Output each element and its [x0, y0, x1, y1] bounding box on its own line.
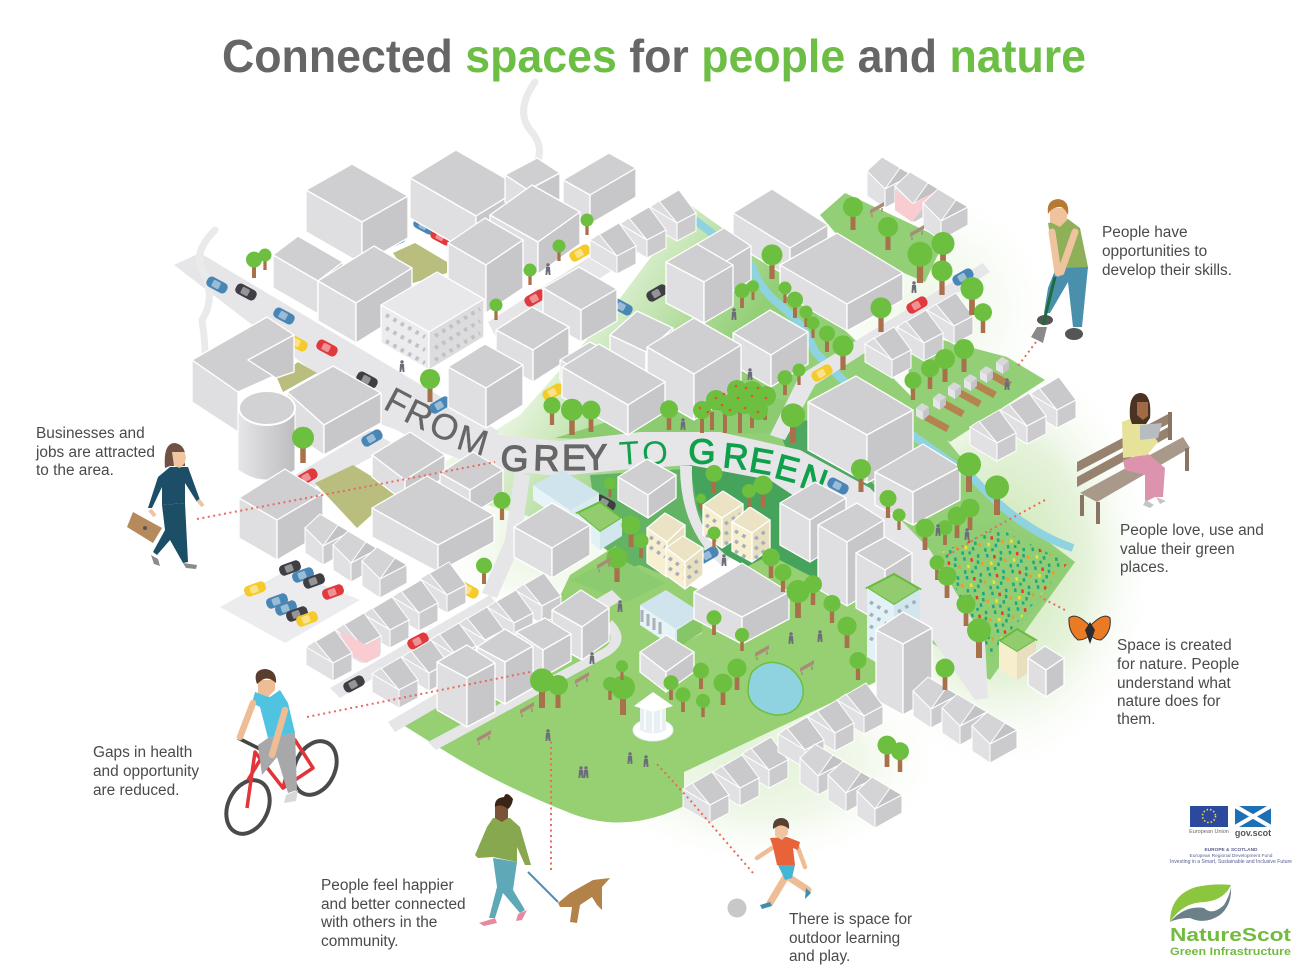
logo: gov.scot saltire	[1235, 806, 1271, 838]
small people in the park and streets	[400, 263, 1010, 778]
person: cyclist on red bicycle	[218, 669, 345, 841]
houses: south-west terrace rows	[306, 562, 561, 708]
funding text: Investing in a Smart, Sustainable and Inclusive Future	[1170, 859, 1292, 865]
buildings: south row	[437, 590, 609, 727]
buildings: east large blocks	[808, 157, 1076, 525]
logo: EU flag	[1189, 806, 1229, 835]
banner text: from grey to green	[378, 379, 832, 502]
soft green glow background	[430, 180, 1160, 870]
funding text: European Regional Development Fund	[1190, 853, 1273, 859]
pond	[748, 662, 803, 715]
label: community: with others in the	[320, 914, 437, 931]
person: reading on a bench	[1077, 393, 1190, 524]
label: community: community.	[321, 933, 399, 950]
parked car over lot	[456, 580, 480, 600]
person: business woman with briefcase	[127, 443, 203, 569]
logo: EU flag: European Union	[1189, 829, 1229, 835]
label: skills: develop their skills.	[1102, 262, 1232, 279]
label: businesses: to the area.	[36, 462, 114, 479]
label: nature: for nature. People	[1117, 656, 1239, 673]
banner text: from grey to green: GREEN	[688, 432, 832, 502]
buildings: east towers	[780, 482, 1064, 715]
funding text: EUROPE & SCOTLAND	[1204, 847, 1258, 853]
label: nature: them.	[1117, 711, 1156, 728]
label: community: People feel happier	[321, 877, 454, 894]
person: child running with ball	[728, 818, 811, 918]
label: nature: understand what	[1117, 675, 1232, 692]
roads	[174, 212, 990, 750]
green ground areas	[403, 193, 1075, 822]
orchard trees	[693, 380, 776, 433]
brownfield lots	[277, 243, 447, 528]
buildings: west-central cluster	[239, 432, 503, 598]
label: health: are reduced.	[93, 782, 179, 799]
logo: gov.scot saltire: gov.scot	[1235, 828, 1271, 838]
person: digging man	[1031, 199, 1088, 343]
label: businesses: jobs are attracted	[35, 444, 155, 461]
banner text: from grey to green: FROM	[378, 379, 493, 464]
benches	[477, 202, 924, 745]
buildings: north-west grey cluster	[273, 150, 636, 343]
banner text: from grey to green: GREY	[500, 436, 608, 479]
buildings: centre with glass and cream flats	[514, 459, 789, 692]
label: nature: Space is created	[1117, 637, 1232, 654]
bandstand gazebo	[633, 692, 673, 741]
label: outdoor learning: There is space for	[789, 911, 912, 928]
label: green places: value their green	[1120, 541, 1235, 558]
banner text: from grey to green: TO	[618, 433, 669, 472]
leader lines	[197, 342, 1065, 873]
trees	[246, 197, 1009, 772]
label: health: Gaps in health	[93, 744, 192, 761]
funding text	[1170, 847, 1292, 865]
gas holder silo	[238, 391, 295, 480]
label: outdoor learning: outdoor learning	[789, 930, 900, 947]
smoke plumes	[199, 82, 540, 355]
label: green places: places.	[1120, 559, 1169, 576]
label: community: and better connected	[321, 896, 466, 913]
houses: top terrace	[590, 190, 696, 274]
label: health: and opportunity	[93, 763, 199, 780]
icon: butterfly	[1069, 616, 1110, 644]
label: outdoor learning: and play.	[789, 948, 850, 965]
label: businesses: Businesses and	[36, 425, 145, 442]
logo: NatureScot: NatureScot	[1170, 924, 1291, 945]
river	[695, 220, 1073, 548]
title: Connected spaces for people and nature	[222, 30, 1086, 82]
parked and moving cars	[205, 216, 975, 694]
logo: NatureScot: Green Infrastructure	[1170, 946, 1291, 958]
person: walker with dog	[475, 794, 610, 926]
allotment plots and sheds	[916, 357, 1010, 429]
buildings: windowed office and central cluster	[381, 189, 903, 435]
flower meadow	[942, 528, 1068, 655]
label: skills: opportunities to	[1102, 243, 1207, 260]
logo: NatureScot	[1170, 884, 1291, 958]
label: green places: People love, use and	[1120, 522, 1264, 539]
label: skills: People have	[1102, 224, 1188, 241]
label: nature: nature does for	[1117, 693, 1221, 710]
dog	[558, 878, 610, 923]
houses: south-east terraces	[683, 677, 1017, 828]
buildings: west L-shaped factory and silo	[192, 317, 381, 480]
